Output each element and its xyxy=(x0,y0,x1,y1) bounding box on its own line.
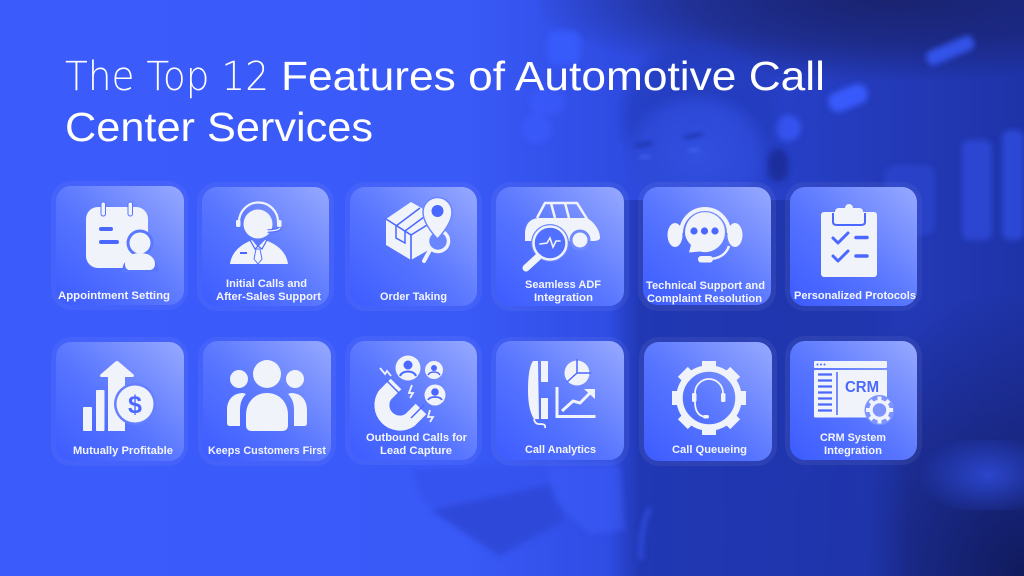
label: Keeps Customers First xyxy=(208,445,326,457)
icon: gear with headset xyxy=(672,361,746,435)
label: Seamless ADF xyxy=(525,279,601,291)
card: Keeps Customers First xyxy=(198,337,336,466)
icon: growth bars with dollar coin: $ xyxy=(128,391,142,419)
card: CRM System Integration xyxy=(785,336,922,465)
icon: calendar with person xyxy=(86,202,159,272)
label: CRM System xyxy=(820,432,886,444)
icon: phone with analytics chart xyxy=(528,359,596,428)
card: Technical Support and Complaint Resolution xyxy=(638,182,776,311)
label: Integration xyxy=(824,445,882,457)
label: Integration xyxy=(534,292,593,304)
label: Mutually Profitable xyxy=(73,445,173,457)
icon: clipboard checklist xyxy=(821,204,877,277)
title: The Top 12 xyxy=(65,54,269,100)
label xyxy=(366,432,468,457)
card: Call Analytics xyxy=(491,337,629,466)
icon: parcel with location pin xyxy=(386,198,452,261)
label: Appointment Setting xyxy=(58,290,170,302)
label: Call Queueing xyxy=(672,444,747,456)
label: Technical Support and xyxy=(646,280,765,292)
card: Personalized Protocols xyxy=(785,182,922,311)
card: Initial Calls and After-Sales Support xyxy=(197,182,334,311)
icon: magnet attracting customers xyxy=(380,356,446,423)
label: Order Taking xyxy=(380,291,447,303)
label: Lead Capture xyxy=(380,445,452,457)
icon: headset with chat bubble xyxy=(668,209,742,262)
laptop and hand xyxy=(412,465,650,560)
icon: group of three people xyxy=(227,360,307,431)
label: Call Analytics xyxy=(525,444,596,456)
agent silhouette xyxy=(610,36,910,576)
card: Appointment Setting xyxy=(51,181,188,310)
title xyxy=(65,53,825,150)
label: Personalized Protocols xyxy=(794,290,916,302)
label xyxy=(525,279,601,304)
label: After-Sales Support xyxy=(216,291,321,303)
title: Features of Automotive Call xyxy=(281,53,825,99)
card: Order Taking xyxy=(345,182,482,311)
label xyxy=(216,278,321,303)
card: Seamless ADF Integration xyxy=(491,182,629,311)
label xyxy=(646,280,765,305)
card: Outbound Calls for Lead Capture xyxy=(345,336,482,465)
label xyxy=(820,432,886,457)
card: Call Queueing xyxy=(639,337,777,466)
label: Complaint Resolution xyxy=(647,293,762,305)
card: Mutually Profitable xyxy=(51,337,188,466)
icon: support agent xyxy=(230,203,288,264)
label: Outbound Calls for xyxy=(366,432,468,444)
title: Center Services xyxy=(65,104,373,150)
icon: CRM window with gear: CRM xyxy=(845,379,879,396)
icon: car under magnifier xyxy=(525,203,600,268)
label: Initial Calls and xyxy=(226,278,307,290)
